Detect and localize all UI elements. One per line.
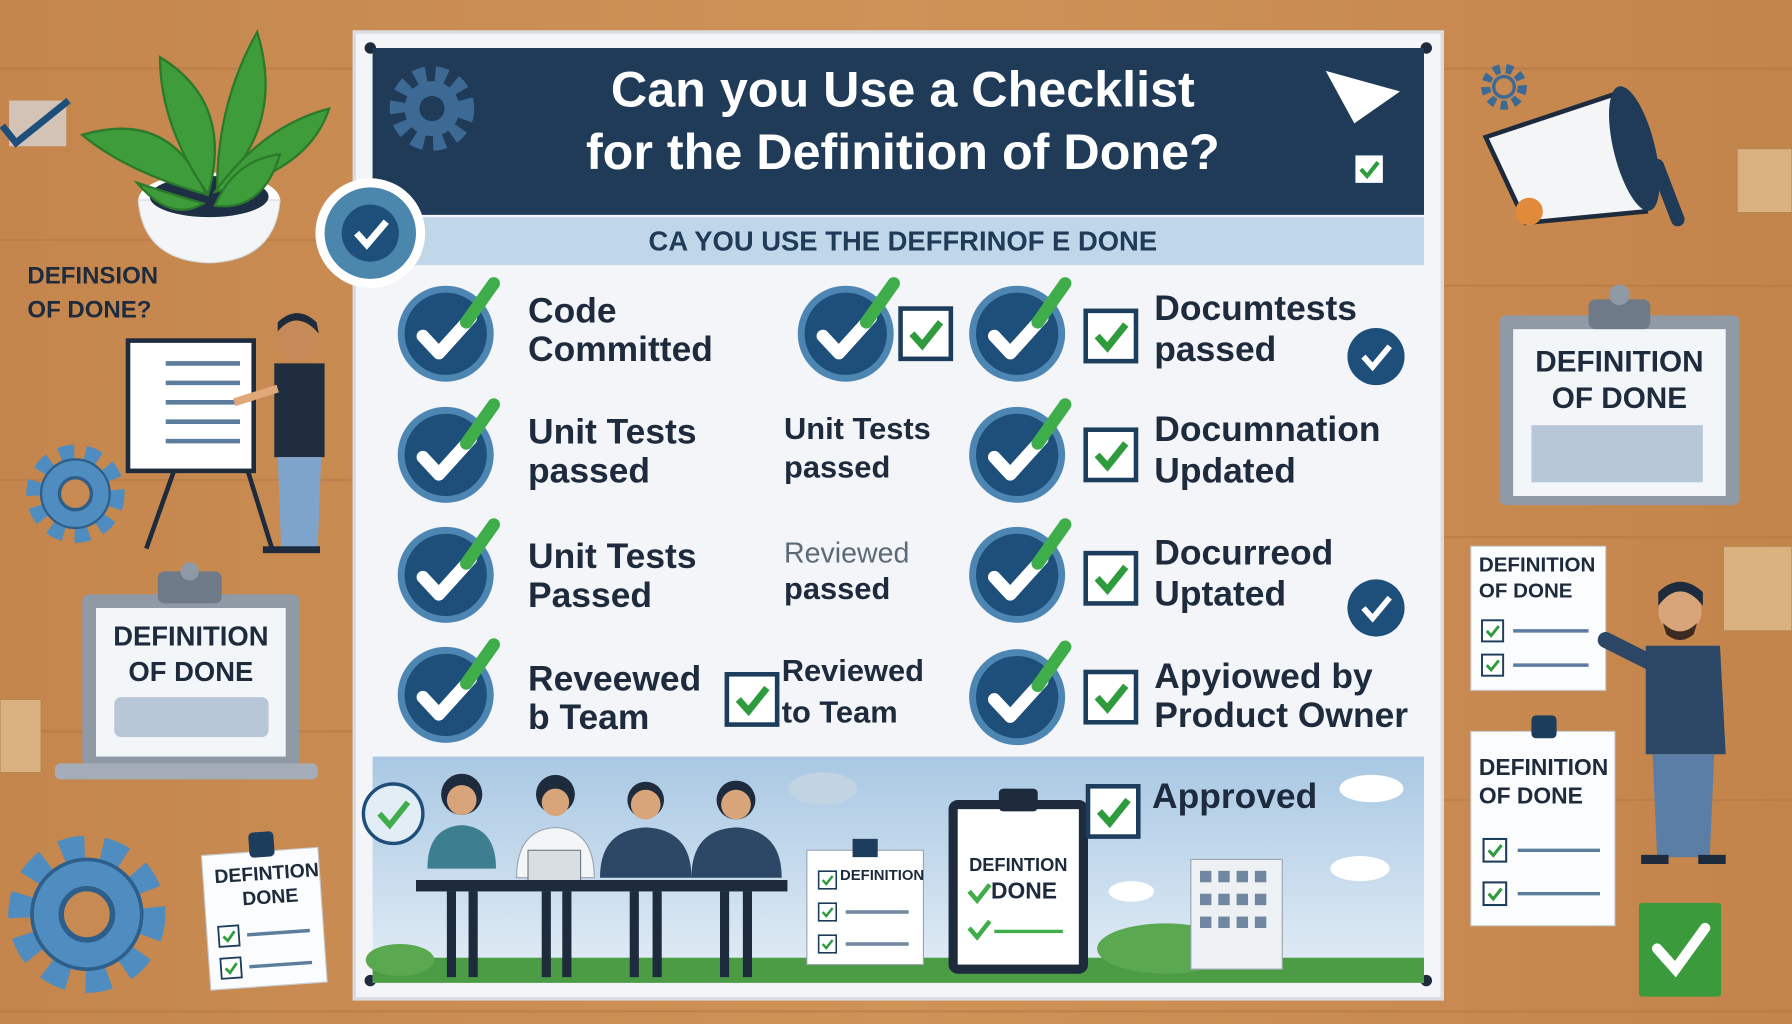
subtitle band [373,217,1424,265]
icon: paper right bottom [1471,715,1615,926]
column 3 checklist: Documtests [1154,288,1357,328]
column 3 checklist: Documnation [1154,409,1380,449]
column 2 checklist: Reviewed [782,653,924,688]
column 2 checklist: passed [784,571,890,606]
text: definition of done? [27,262,158,324]
column 1 checklist: Unit Tests [528,411,697,451]
badge [315,178,425,288]
icon: clipboard definition done [949,789,1088,974]
text: approved: Approved [1152,776,1317,816]
icon: clipboard definition done: DEFINTION [969,854,1068,875]
icon: paper right: OF DONE [1479,580,1573,603]
icon: small clipboard left: DONE [242,885,299,910]
building [1191,859,1282,969]
icon: small clipboard left [200,828,327,990]
subtitle band: CA YOU USE THE DEFFRINOF E DONE [649,225,1157,256]
column 1 checklist: Reveewed [528,658,701,698]
column 1 checklist: Code [528,290,617,330]
text: definition of done?: OF DONE? [27,297,151,324]
icon: paper right bottom: DEFINITION [1479,754,1608,780]
column 2 checklist: to Team [782,694,898,729]
column 2 checklist: Unit Tests [784,411,931,446]
column 2 checklist: passed [784,450,890,485]
icon: paper right: DEFINITION [1479,553,1595,576]
icon: green check box [1639,903,1721,997]
column 3 checklist [969,283,1408,745]
column 3 checklist: Docurreod [1154,533,1333,573]
icon: clipboard small: DEFINITION [840,868,924,884]
icon: clipboard right definition of done: DEFINITION [1535,345,1704,378]
column 1 checklist: b Team [528,697,649,737]
icon: clipboard definition done: DONE [991,877,1057,903]
title bar: for the Definition of Done? [586,123,1220,180]
column 2 checklist: Reviewed [784,537,909,569]
column 2 checklist [727,283,951,729]
icon: laptop definition of done [55,562,318,779]
icon: clipboard right definition of done [1499,285,1739,505]
column 3 checklist: Apyiowed by [1154,656,1373,696]
icon: person with easel [128,313,325,553]
bottom scene [363,757,1424,983]
column 3 checklist: Updated [1154,450,1296,490]
icon: plant [82,32,329,263]
icon: checkmark top-left [2,101,69,146]
column 1 checklist: Committed [528,329,713,369]
column 1 checklist: passed [528,450,650,490]
icon: small clipboard left: DEFINTION [214,859,320,888]
icon: clipboard right definition of done: OF DONE [1552,382,1687,415]
icon: paper right [1471,546,1606,690]
panel: main poster [315,32,1442,999]
text: definition of done?: DEFINSION [27,262,158,289]
icon: laptop definition of done: DEFINITION [113,621,269,652]
title bar [373,48,1424,215]
icon: small gear top right [1486,69,1522,105]
column 1 checklist: Passed [528,575,652,615]
icon: laptop definition of done: OF DONE [128,656,253,687]
decorative box [0,699,41,773]
icon: person right [1606,582,1726,864]
icon: gear bottom left [25,852,149,976]
column 1 checklist: Unit Tests [528,536,697,576]
column 3 checklist: Product Owner [1154,695,1408,735]
title bar: Can you Use a Checklist [611,60,1195,117]
icon: clipboard small [807,839,924,965]
text: approved [1088,776,1317,837]
column 1 checklist [398,283,713,743]
icon: megaphone [1486,81,1678,225]
icon: paper right bottom: OF DONE [1479,782,1583,808]
icon: gear left [37,455,114,533]
column 3 checklist: Uptated [1154,574,1286,614]
icon: small badge [363,784,423,843]
column 3 checklist: passed [1154,329,1276,369]
team at table [416,774,787,977]
